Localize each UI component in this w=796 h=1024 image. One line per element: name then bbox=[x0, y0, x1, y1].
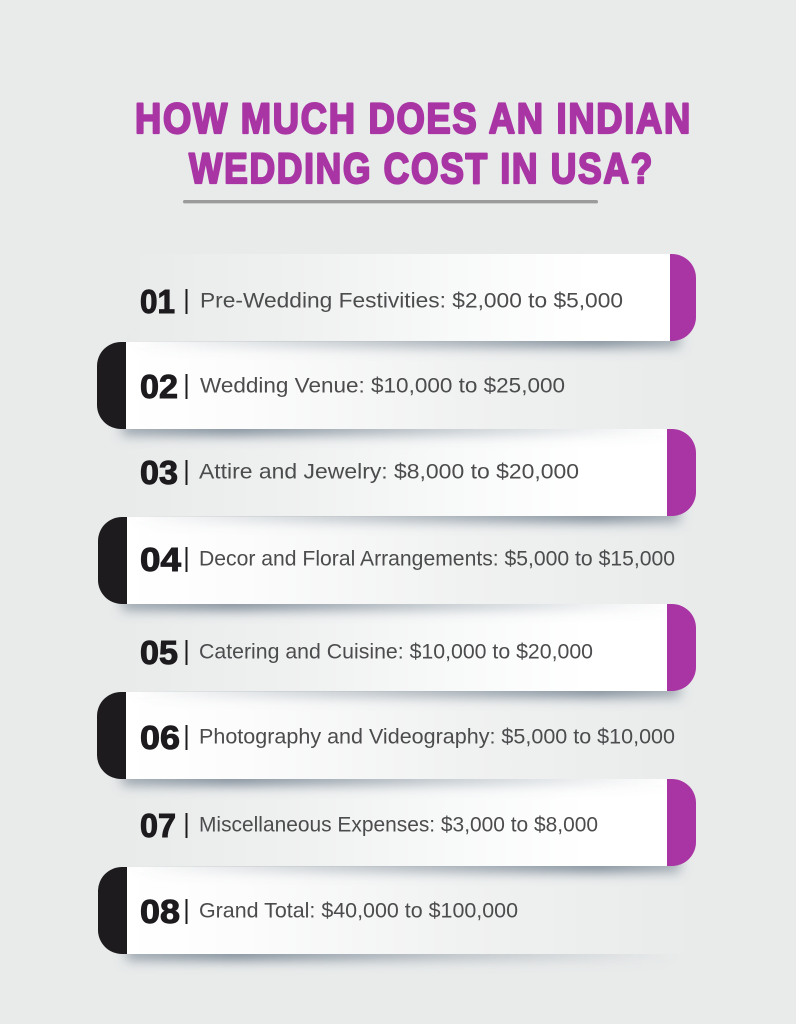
row 04: decor and floral arrangements: Decor and Floral Arrangements: $5,000 to $15,000 bbox=[199, 548, 675, 570]
row 05: catering and cuisine: 05 bbox=[140, 634, 178, 671]
row 01: pre-wedding festivities bbox=[130, 254, 696, 347]
row 08: grand total: 08 bbox=[140, 893, 180, 930]
row 01: pre-wedding festivities: 01 bbox=[140, 283, 175, 320]
title underline bbox=[183, 200, 598, 203]
row 06: photography and videography: Photography and Videography: $5,000 to $10,000 bbox=[199, 726, 675, 748]
row 04: decor and floral arrangements bbox=[98, 517, 696, 610]
row 02: wedding venue: Wedding Venue: $10,000 to $25,000 bbox=[200, 374, 565, 398]
row 06: photography and videography: 06 bbox=[140, 719, 180, 756]
row 04: decor and floral arrangements: 04 bbox=[140, 541, 182, 578]
row 02: wedding venue bbox=[97, 342, 696, 435]
row 02: wedding venue: 02 bbox=[140, 368, 178, 405]
row 03: attire and jewelry: Attire and Jewelry: $8,000 to $20,000 bbox=[199, 460, 579, 484]
row 08: grand total: Grand Total: $40,000 to $100,000 bbox=[199, 900, 518, 922]
title: WEDDING COST IN USA? bbox=[189, 145, 654, 193]
row 07: miscellaneous expenses: 07 bbox=[140, 807, 176, 844]
row 06: photography and videography bbox=[97, 692, 696, 785]
row 07: miscellaneous expenses: Miscellaneous Expenses: $3,000 to $8,000 bbox=[199, 814, 598, 836]
row 05: catering and cuisine bbox=[126, 604, 696, 697]
row 07: miscellaneous expenses bbox=[126, 779, 696, 872]
row 03: attire and jewelry: 03 bbox=[140, 454, 178, 491]
row 05: catering and cuisine: Catering and Cuisine: $10,000 to $20,000 bbox=[199, 640, 593, 664]
title bbox=[135, 95, 692, 193]
title: HOW MUCH DOES AN INDIAN bbox=[135, 95, 692, 143]
row 03: attire and jewelry bbox=[126, 429, 696, 522]
row 08: grand total bbox=[98, 867, 696, 960]
row 01: pre-wedding festivities: Pre-Wedding Festivities: $2,000 to $5,000 bbox=[200, 290, 623, 312]
